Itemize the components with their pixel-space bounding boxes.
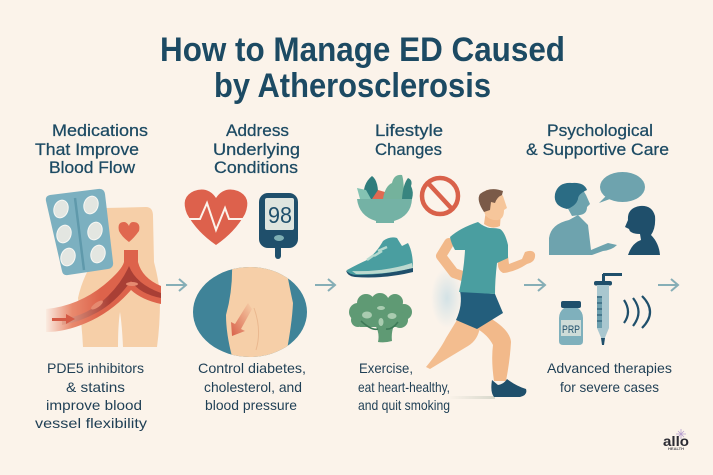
text: medications: improve blood [46,397,142,413]
text: lifestyle: and quit smoking [358,397,450,413]
text: medications: & statins [66,379,125,395]
heading: medications [35,122,148,177]
heading: medications: Medications [52,122,148,140]
title [160,31,565,105]
illustration: body with artery [46,207,161,347]
icon: broccoli [349,293,412,342]
text: lifestyle [358,360,450,413]
heading: psychological care: Psychological [547,122,653,140]
arrow 1 [166,279,186,291]
text: advanced therapies: Advanced therapies [547,360,672,376]
text: conditions [198,360,306,413]
heading: underlying conditions: Underlying [213,141,300,159]
heading: underlying conditions [213,122,300,177]
icon: salad bowl [357,175,413,223]
illustration: therapist conversation [549,172,660,255]
heading: lifestyle [375,122,443,159]
title: How to Manage ED Caused [160,31,565,69]
icon: shockwave arcs [624,296,650,328]
arrow 2 [315,279,335,291]
text: advanced therapies: for severe cases [560,379,659,395]
icon: glucose meter [259,193,298,259]
heading: medications: That Improve [35,141,139,159]
illustration: jogging man [426,189,535,399]
heading: psychological care: & Supportive Care [526,141,669,159]
icon: PRP vial: PRP [562,324,580,336]
logo: allo health [663,429,689,451]
text: conditions: cholesterol, and [204,379,302,395]
text: lifestyle: eat heart-healthy, [358,379,450,395]
heading: psychological care [526,122,669,159]
heading: lifestyle: Lifestyle [375,122,443,140]
text: medications: PDE5 inhibitors [47,360,144,376]
text: advanced therapies [547,360,672,395]
text: medications [35,360,147,431]
icon: no smoking sign [422,178,458,214]
text: lifestyle: Exercise, [359,360,413,376]
logo: allo health: HEALTH [668,447,685,451]
icon: syringe [594,274,622,345]
icon: PRP vial [559,301,583,345]
illustration: lower abdomen oval [193,262,307,360]
arrow 4 [658,279,678,291]
heading: underlying conditions: Address [226,122,289,140]
icon: heart with pulse [185,190,247,245]
icon: blister pack [46,189,113,275]
logo: allo health: allo [663,433,689,449]
text: conditions: Control diabetes, [198,360,306,376]
arrow 3 [524,279,545,291]
text: conditions: blood pressure [205,397,297,413]
text: medications: vessel flexibility [35,415,147,431]
icon: glucose meter: 98 [268,202,292,228]
icon: sneaker [346,237,413,277]
heading: underlying conditions: Conditions [214,159,298,177]
heading: lifestyle: Changes [375,141,442,159]
title: by Atherosclerosis [214,67,491,105]
heading: medications: Blood Flow [49,159,135,177]
